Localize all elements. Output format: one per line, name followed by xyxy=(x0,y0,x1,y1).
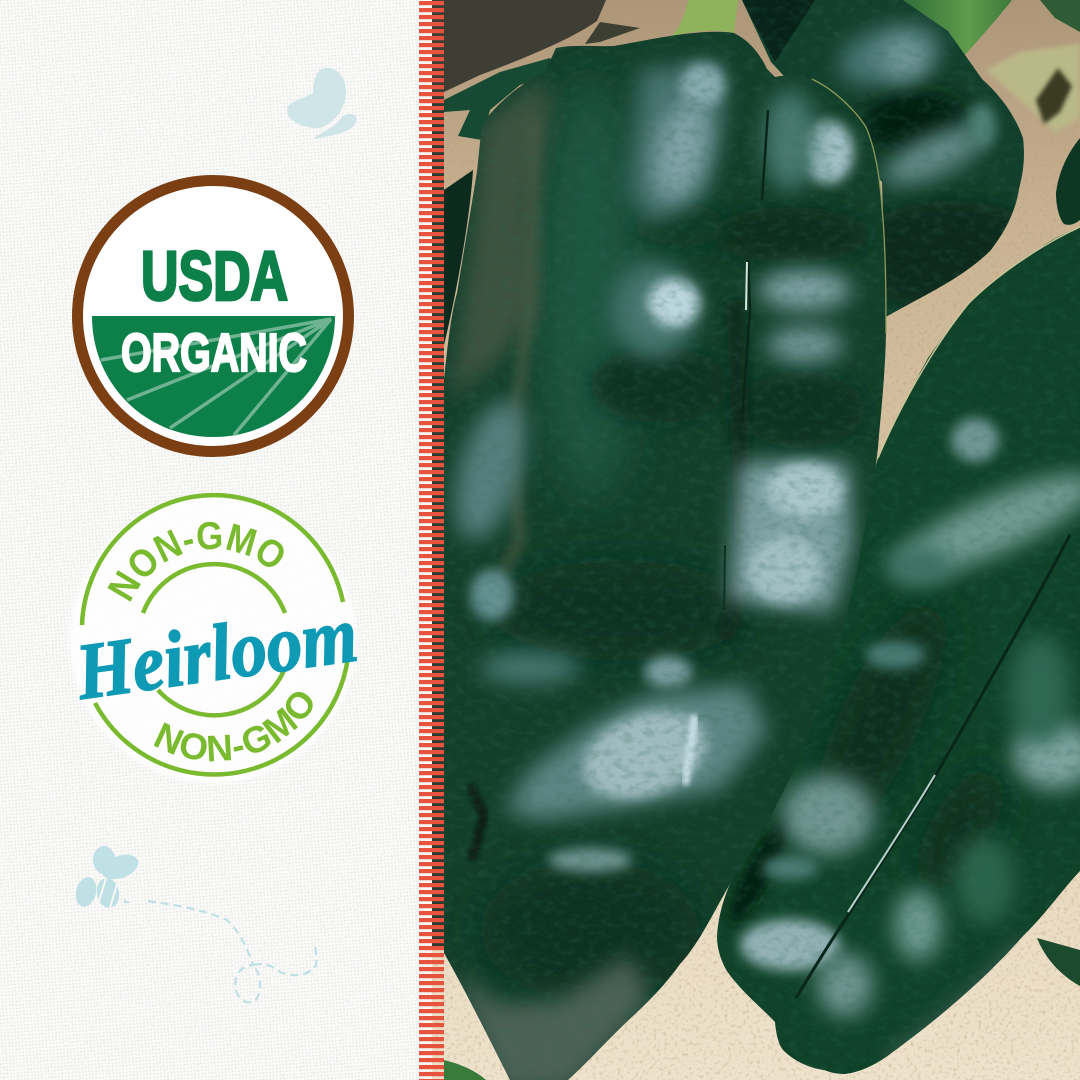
top-left dark speckled foliage xyxy=(432,0,640,140)
USDA heading: USDA xyxy=(141,237,288,315)
top-right dried blossom xyxy=(986,0,1080,132)
NON-GMO upper text: NON-GMO xyxy=(108,522,284,602)
bee xyxy=(72,846,142,910)
background: white linen fabric panel xyxy=(0,0,432,1080)
green field xyxy=(92,316,335,437)
dark pepper behind left xyxy=(444,170,473,345)
right pepper rim xyxy=(878,227,1080,458)
photo: poblano peppers on a beige surface xyxy=(432,0,1080,1080)
main pepper rim highlight xyxy=(812,79,886,334)
icon: butterfly xyxy=(287,68,357,139)
highlights xyxy=(441,62,854,1080)
badge: Non-GMO Heirloom xyxy=(69,492,363,784)
highlights xyxy=(740,418,1080,1080)
flight trail xyxy=(148,901,316,1002)
Heirloom script: Heirloom xyxy=(70,591,363,717)
main pepper stem xyxy=(672,0,738,36)
NON-GMO lower text: NON-GMO xyxy=(154,692,313,762)
leaf bottom right xyxy=(1037,938,1080,986)
main pepper xyxy=(440,20,890,1080)
ridge line xyxy=(796,535,1070,998)
dark areas xyxy=(710,207,870,263)
edge pepper right xyxy=(1056,138,1080,225)
ORGANIC label: ORGANIC xyxy=(121,323,307,383)
back pepper xyxy=(742,0,1024,317)
surface xyxy=(432,0,1080,1080)
icon: bee with dashed flight trail xyxy=(72,846,316,1002)
field rays xyxy=(101,319,331,435)
back pepper stem xyxy=(903,0,1012,55)
leaf bottom left xyxy=(444,1060,486,1080)
olive left lobe xyxy=(450,80,552,400)
right pepper xyxy=(700,220,1080,1080)
red stitched stripe border xyxy=(419,0,444,1080)
badge: USDA Organic xyxy=(78,180,348,452)
crease xyxy=(742,110,768,420)
ring arcs xyxy=(82,495,348,775)
